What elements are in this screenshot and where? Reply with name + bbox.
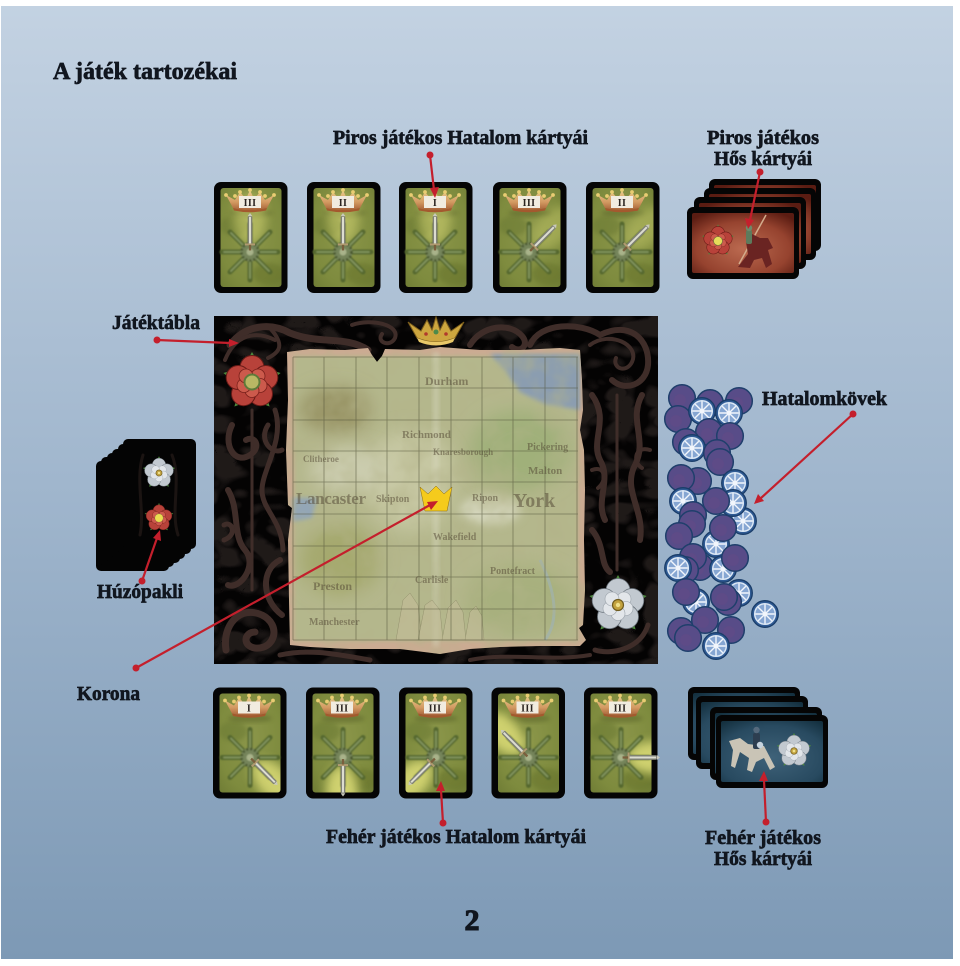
- power card II diagonal: [586, 182, 660, 293]
- map place names: Preston: [313, 579, 352, 593]
- map grid: [293, 357, 578, 640]
- map place names: Ripon: [472, 493, 499, 504]
- power card I: I: [247, 704, 251, 714]
- map place names: Skipton: [376, 494, 410, 505]
- label: red player power cards: Piros játékos Hatalom kártyái: [333, 127, 588, 149]
- game board: [214, 316, 658, 664]
- map figures: [396, 593, 484, 640]
- power card III: III: [244, 198, 256, 209]
- red hero card stack: [687, 179, 821, 279]
- deck ornaments: [140, 455, 178, 535]
- parchment map: [284, 345, 588, 657]
- map place names: Malton: [528, 465, 562, 477]
- power card III diagonal: [493, 182, 566, 293]
- power card III: III: [614, 704, 626, 714]
- power card III: [584, 688, 660, 798]
- power card I: [213, 688, 286, 798]
- label: draw deck: Húzópakli: [97, 581, 183, 603]
- white rose: [589, 575, 647, 630]
- power card III: III: [336, 704, 348, 714]
- red player power cards row: [214, 182, 676, 293]
- icon: red knight: [738, 215, 773, 268]
- map place names: Pontefract: [490, 566, 536, 577]
- white player power cards row: [213, 688, 660, 798]
- icon: white rose on deck: [143, 456, 175, 487]
- label: red player hero cards: [707, 127, 819, 170]
- map place names: Knaresborough: [433, 447, 493, 457]
- label: crown: Korona: [77, 683, 140, 705]
- power card II: [307, 182, 380, 293]
- map place names: Clitheroe: [303, 454, 339, 464]
- map place names: Carlisle: [415, 575, 449, 586]
- power card II: II: [339, 198, 347, 209]
- label: white player hero cards: Fehér játékos: [705, 827, 821, 849]
- label: red player hero cards: Piros játékos: [707, 127, 819, 149]
- frame texture: [214, 316, 658, 664]
- arrow: to red hero card: [745, 168, 764, 229]
- power card II diagonal: II: [618, 198, 626, 209]
- yellow crown token: [420, 486, 452, 511]
- label: game board: Játéktábla: [112, 312, 200, 334]
- power card I: [399, 182, 472, 293]
- label: red player hero cards: Hős kártyái: [714, 148, 812, 170]
- map place names: Wakefield: [433, 532, 477, 543]
- power card III: III: [521, 704, 534, 714]
- white hero card stack: [688, 687, 828, 788]
- icon: white knight: [729, 727, 775, 772]
- arrow: to board: [154, 336, 239, 347]
- label: power stones: Hatalomkövek: [762, 388, 888, 410]
- arrow: to white power card: [436, 781, 446, 826]
- power card I: I: [433, 198, 437, 209]
- arrow: to crown: [132, 501, 438, 672]
- power stones pile: [665, 385, 778, 659]
- icon: white rose on hero card: [777, 733, 811, 766]
- arrow: to draw deck: [138, 530, 161, 584]
- map place names: Manchester: [309, 617, 360, 628]
- board frame ornaments: [224, 322, 650, 660]
- power card III: [492, 688, 565, 798]
- title: A játék tartozékai: [53, 59, 237, 85]
- label: white player power cards: Fehér játékos Hatalom kártyái: [326, 826, 586, 848]
- arrow: to power stones: [754, 410, 856, 504]
- map terrain: [284, 345, 588, 657]
- red rose: [223, 352, 281, 406]
- map place names: York: [513, 490, 556, 512]
- draw deck: [96, 439, 196, 571]
- arrow: to white hero card: [759, 771, 770, 826]
- map place names: Lancaster: [296, 489, 366, 508]
- icon: red rose on deck: [145, 503, 173, 530]
- power card III: III: [429, 704, 441, 714]
- map place names: Richmond: [402, 429, 451, 441]
- map place names: Pickering: [527, 442, 568, 453]
- icon: red rose on hero card: [702, 224, 734, 254]
- page number: 2: [464, 904, 480, 937]
- power card III: [214, 182, 288, 293]
- power card III diagonal: III: [523, 198, 535, 209]
- map place names: [296, 374, 568, 628]
- power card III: [399, 688, 472, 798]
- gold crown: [408, 317, 464, 346]
- label: white player hero cards: Hős kártyái: [714, 848, 812, 870]
- map place names: Durham: [425, 374, 468, 388]
- power card III: [306, 688, 380, 798]
- label: white player hero cards: [705, 827, 821, 870]
- arrow: to red power card: [426, 152, 439, 198]
